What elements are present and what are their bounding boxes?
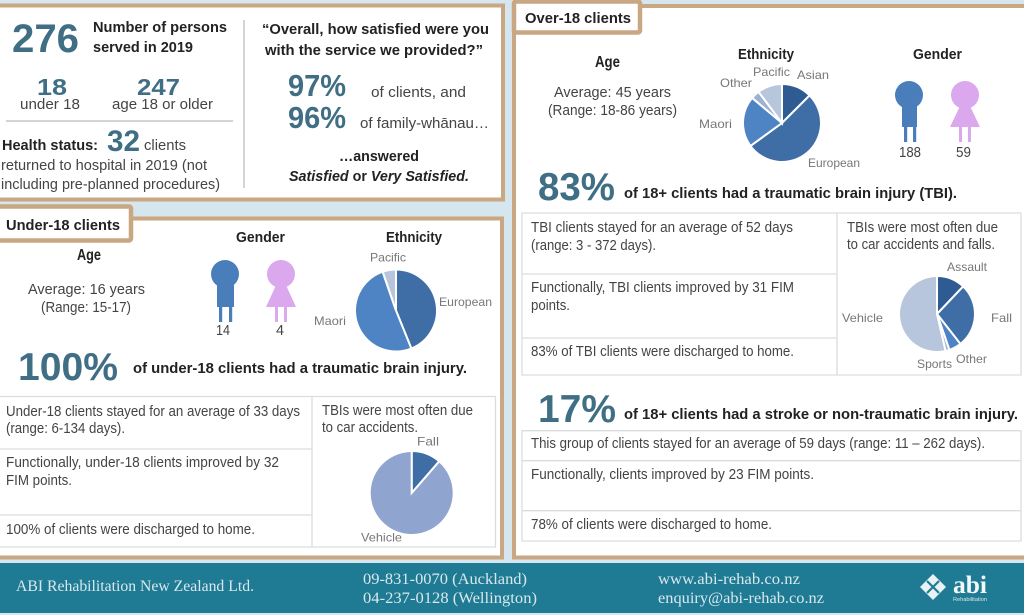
- total persons served: served in 2019: [93, 40, 193, 56]
- satisfaction question: [262, 22, 489, 59]
- table: under-18 outcomes: to car accidents.: [322, 420, 418, 436]
- age: Age: [77, 247, 101, 264]
- ethnicity pie chart: Pacific: [753, 65, 790, 79]
- under 18 count: 18: [37, 74, 67, 100]
- cause pie chart: under-18: [361, 435, 454, 545]
- health status: clients: [144, 138, 186, 154]
- satisfaction clients: 97%: [288, 68, 346, 103]
- tab: under-18 clients: Under-18 clients: [6, 218, 120, 234]
- gender: Gender: [913, 47, 962, 63]
- table: stroke outcomes: 78% of clients were discharged to home.: [531, 517, 772, 533]
- age: Average: 16 years: [28, 282, 145, 298]
- cause pie chart: over-18: Fall: [991, 311, 1012, 325]
- table: TBI outcomes: 83% of TBI clients were discharged to home.: [531, 344, 794, 360]
- organisation name: ABI Rehabilitation New Zealand Ltd.: [16, 578, 254, 595]
- cause pie chart: over-18: Vehicle: [842, 311, 883, 325]
- tab: over-18 clients: [514, 2, 640, 32]
- tab: under-18 clients: [0, 206, 131, 240]
- under 18 count: [20, 74, 80, 113]
- headline: 17%: [538, 388, 1018, 431]
- table: under-18 outcomes: Functionally, under-18 clients improved by 32: [6, 455, 279, 471]
- table: stroke outcomes: [522, 431, 1021, 541]
- table: TBI outcomes: to car accidents and falls.: [847, 237, 995, 253]
- health status: including pre-planned procedures): [1, 177, 220, 193]
- icon: female figure: [266, 260, 296, 322]
- satisfaction family: of family-whānau…: [360, 115, 489, 132]
- age 18 or older count: 247: [137, 74, 180, 100]
- footer: [0, 563, 1024, 613]
- ethnicity pie chart: European: [439, 295, 492, 309]
- gender: 14: [216, 323, 230, 339]
- headline: 17%: 17%: [538, 388, 616, 431]
- headline: 83%: 83%: [538, 166, 615, 209]
- health status: returned to hospital in 2019 (not: [1, 158, 207, 174]
- ethnicity pie chart: [314, 230, 492, 351]
- logo: abi: [920, 572, 987, 603]
- age: (Range: 15-17): [41, 300, 131, 316]
- table: stroke outcomes: Functionally, clients improved by 23 FIM points.: [531, 467, 814, 483]
- cause pie chart: over-18: Other: [956, 352, 987, 366]
- health status: Health status:: [2, 138, 98, 154]
- cause pie chart: over-18: [842, 260, 1012, 371]
- age: Age: [595, 54, 620, 71]
- panel: under-18 clients: [0, 206, 502, 558]
- headline: 100%: 100%: [18, 346, 118, 389]
- headline: 83%: of 18+ clients had a traumatic brain injury (TBI).: [624, 186, 957, 202]
- ethnicity pie chart: Other: [720, 76, 752, 90]
- table: under-18 outcomes: Under-18 clients stayed for an average of 33 days: [6, 404, 300, 420]
- ethnicity pie chart: Ethnicity: [386, 230, 442, 246]
- satisfaction family: [288, 100, 489, 135]
- total persons served: [12, 17, 227, 61]
- under 18 count: under 18: [20, 96, 80, 113]
- headline: 100%: [18, 346, 467, 389]
- gender: 4: [276, 323, 284, 339]
- icon: male figure: [211, 260, 239, 322]
- table: under-18 outcomes: FIM points.: [6, 473, 72, 489]
- table: TBI outcomes: Functionally, TBI clients improved by 31 FIM: [531, 280, 794, 296]
- table: under-18 outcomes: 100% of clients were discharged to home.: [6, 522, 255, 538]
- ethnicity pie chart: Maori: [699, 117, 732, 131]
- logo: abi: Rehabilitation: [953, 597, 987, 603]
- table: TBI outcomes: TBI clients stayed for an average of 52 days: [531, 220, 793, 236]
- cause pie chart: over-18: Sports: [917, 357, 952, 371]
- gender: [211, 230, 296, 339]
- satisfaction question: with the service we provided?”: [264, 43, 483, 59]
- satisfaction answer: …answered: [339, 149, 419, 165]
- panel: summary: [0, 6, 503, 200]
- web and email: enquiry@abi-rehab.co.nz: [658, 590, 824, 607]
- cause pie chart: over-18: Assault: [947, 260, 988, 274]
- table: under-18 outcomes: (range: 6-134 days).: [6, 421, 125, 437]
- ethnicity pie chart: Ethnicity: [738, 47, 794, 63]
- web and email: www.abi-rehab.co.nz: [658, 571, 800, 588]
- satisfaction family: 96%: [288, 100, 346, 135]
- cause pie chart: under-18: Fall: [417, 435, 439, 449]
- ethnicity pie chart: Asian: [797, 68, 829, 82]
- total persons served: Number of persons: [93, 20, 227, 36]
- phone numbers: 09-831-0070 (Auckland): [363, 571, 527, 588]
- panel: over-18 clients: [514, 2, 1024, 558]
- health status: [1, 125, 220, 193]
- ethnicity pie chart: Maori: [314, 314, 346, 328]
- satisfaction clients: [288, 68, 466, 103]
- age: (Range: 18-86 years): [548, 103, 677, 119]
- table: stroke outcomes: This group of clients stayed for an average of 59 days (range: 11 – 262 days).: [531, 436, 985, 452]
- age: [548, 54, 677, 119]
- ethnicity pie chart: European: [808, 156, 860, 170]
- health status: 32: [107, 125, 140, 158]
- web and email: [658, 571, 824, 607]
- gender: 188: [899, 145, 921, 161]
- headline: 17%: of 18+ clients had a stroke or non-traumatic brain injury.: [624, 407, 1018, 423]
- ethnicity pie chart: [699, 47, 860, 170]
- age: Average: 45 years: [554, 85, 671, 101]
- cause pie chart: under-18: Vehicle: [361, 531, 402, 545]
- headline: 83%: [538, 166, 957, 209]
- satisfaction question: “Overall, how satisfied were you: [262, 22, 489, 38]
- gender: Gender: [236, 230, 285, 246]
- table: under-18 outcomes: [0, 396, 496, 547]
- headline: 100%: of under-18 clients had a traumatic brain injury.: [133, 361, 467, 377]
- satisfaction answer: [289, 149, 469, 185]
- table: TBI outcomes: [522, 213, 1021, 375]
- ethnicity pie chart: Pacific: [370, 250, 406, 264]
- age: [28, 247, 145, 316]
- tab: over-18 clients: Over-18 clients: [525, 11, 631, 27]
- total persons served: 276: [12, 17, 79, 61]
- icon: male figure: [895, 81, 923, 142]
- table: TBI outcomes: (range: 3 - 372 days).: [531, 238, 656, 254]
- phone numbers: [363, 571, 537, 607]
- table: TBI outcomes: TBIs were most often due: [847, 220, 998, 236]
- satisfaction answer: Satisfied or Very Satisfied.: [289, 169, 469, 185]
- table: TBI outcomes: points.: [531, 298, 570, 314]
- age 18 or older count: age 18 or older: [112, 96, 213, 113]
- icon: female figure: [950, 81, 980, 142]
- satisfaction clients: of clients, and: [371, 84, 466, 101]
- phone numbers: 04-237-0128 (Wellington): [363, 590, 537, 607]
- logo: abi: abi: [953, 572, 987, 599]
- table: under-18 outcomes: TBIs were most often due: [322, 403, 473, 419]
- age 18 or older count: [112, 74, 213, 113]
- gender: 59: [956, 145, 971, 161]
- gender: [895, 47, 980, 161]
